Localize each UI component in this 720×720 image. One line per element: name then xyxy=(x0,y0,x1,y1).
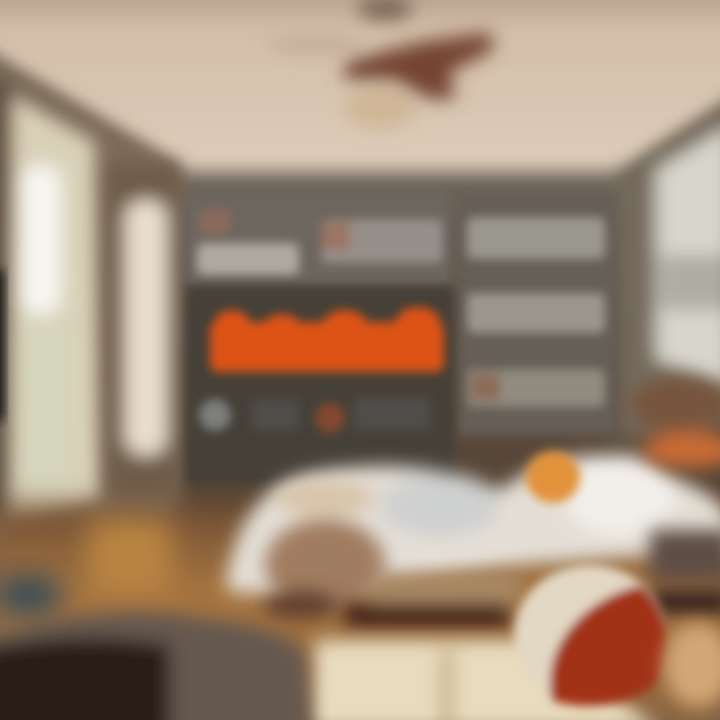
floor xyxy=(0,505,720,720)
lower shelf items xyxy=(199,398,430,433)
ceiling fan xyxy=(265,0,494,128)
left dark edge xyxy=(0,270,4,420)
orange pillow xyxy=(526,451,580,503)
red and white ball xyxy=(514,565,666,706)
small tan ball xyxy=(664,623,720,707)
rug xyxy=(310,640,660,720)
bed blanket xyxy=(225,455,720,600)
tan cushion on bed xyxy=(265,480,385,611)
orange display xyxy=(210,307,444,372)
ceiling xyxy=(0,0,720,172)
blue-grey object xyxy=(0,573,64,617)
bookshelf: dark centre panel xyxy=(186,285,454,485)
dark sofa xyxy=(0,612,312,720)
bed frame xyxy=(262,575,520,627)
bookshelf: upper left shelves xyxy=(186,190,451,288)
centre window xyxy=(108,165,178,495)
back wall xyxy=(0,150,720,550)
bookshelf: right shelves xyxy=(458,192,616,435)
right brown and orange cushion xyxy=(630,377,720,468)
right side table xyxy=(650,530,720,614)
right wall and window xyxy=(618,95,720,440)
left wall xyxy=(0,50,180,560)
left window xyxy=(10,95,100,530)
